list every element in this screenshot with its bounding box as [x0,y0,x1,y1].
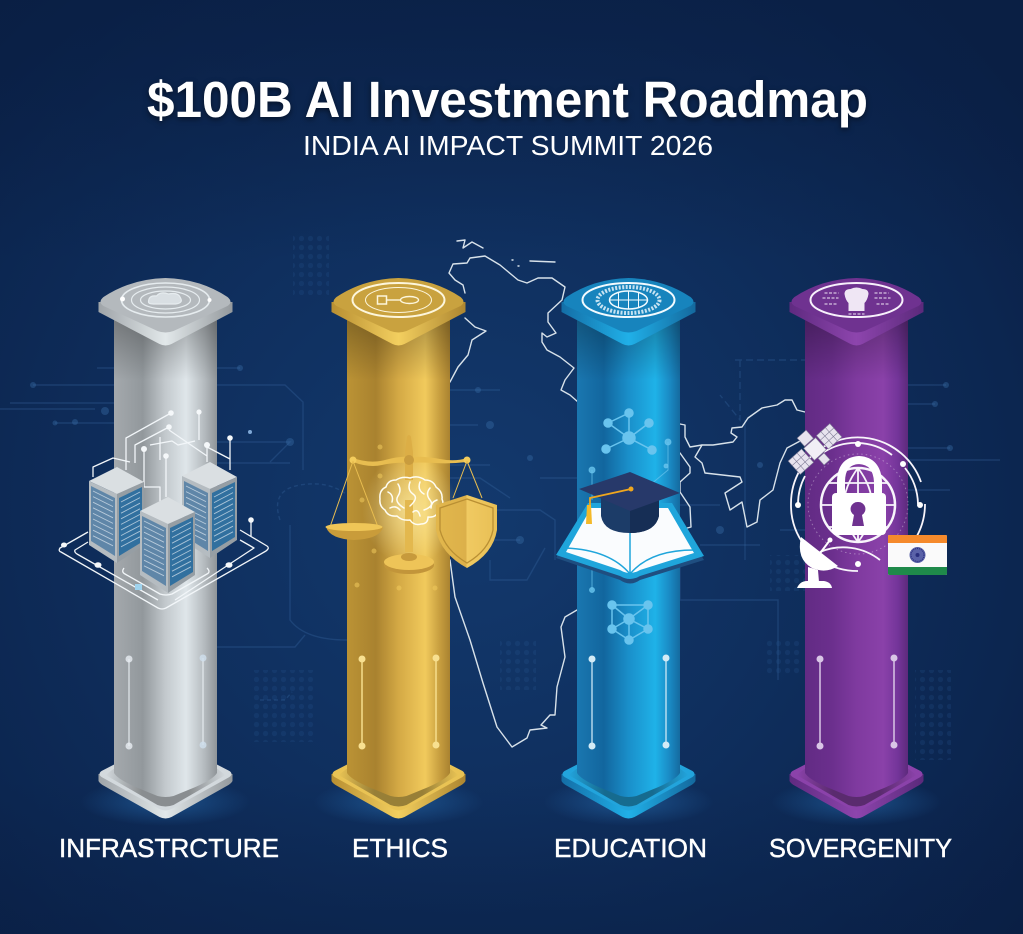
satellite [781,415,848,481]
pillar: education [544,278,714,826]
label: infrastructure: INFRASTRCTURE [59,833,279,863]
scale beam [353,457,467,466]
brain [380,477,443,524]
icon: upper network nodes [602,409,656,454]
cap emblem: key and brain [352,283,444,317]
cap emblem: globe [582,283,674,317]
flag of India [888,535,947,575]
background circuit traces [0,360,1000,700]
shield [436,495,497,568]
connector lines [126,654,206,750]
icon: secure lock, globe, satellite and dish [781,415,947,588]
pillar: ethics [314,278,484,826]
satellite dish [800,537,838,571]
cap emblem: national emblem [810,283,902,317]
rings [791,437,925,571]
pillar: infrastructure [80,278,250,826]
label: ethics: ETHICS [352,833,448,863]
icon: graduation cap on open book [556,439,704,592]
icon: scales of justice with brain and shield [326,435,497,590]
pillar: sovereignty [772,278,942,826]
icon: server racks and circuit board [59,409,268,609]
open book [556,506,704,584]
label: education: EDUCATION [554,833,707,863]
left scale pan [326,527,383,540]
title: $100B AI Investment Roadmap [147,71,868,128]
scale stand [405,500,413,552]
map of India outline [449,240,805,747]
connector lines [358,654,440,750]
icon: lower network nodes [608,601,652,644]
subtitle: INDIA AI IMPACT SUMMIT 2026 [303,130,713,161]
label: sovergenity: SOVERGENITY [769,833,952,863]
padlock [841,460,878,495]
connector lines [588,654,670,750]
connector lines [816,654,898,750]
background dot matrices [30,235,953,760]
mortarboard [601,495,659,533]
cap emblem: cloud [120,283,212,317]
